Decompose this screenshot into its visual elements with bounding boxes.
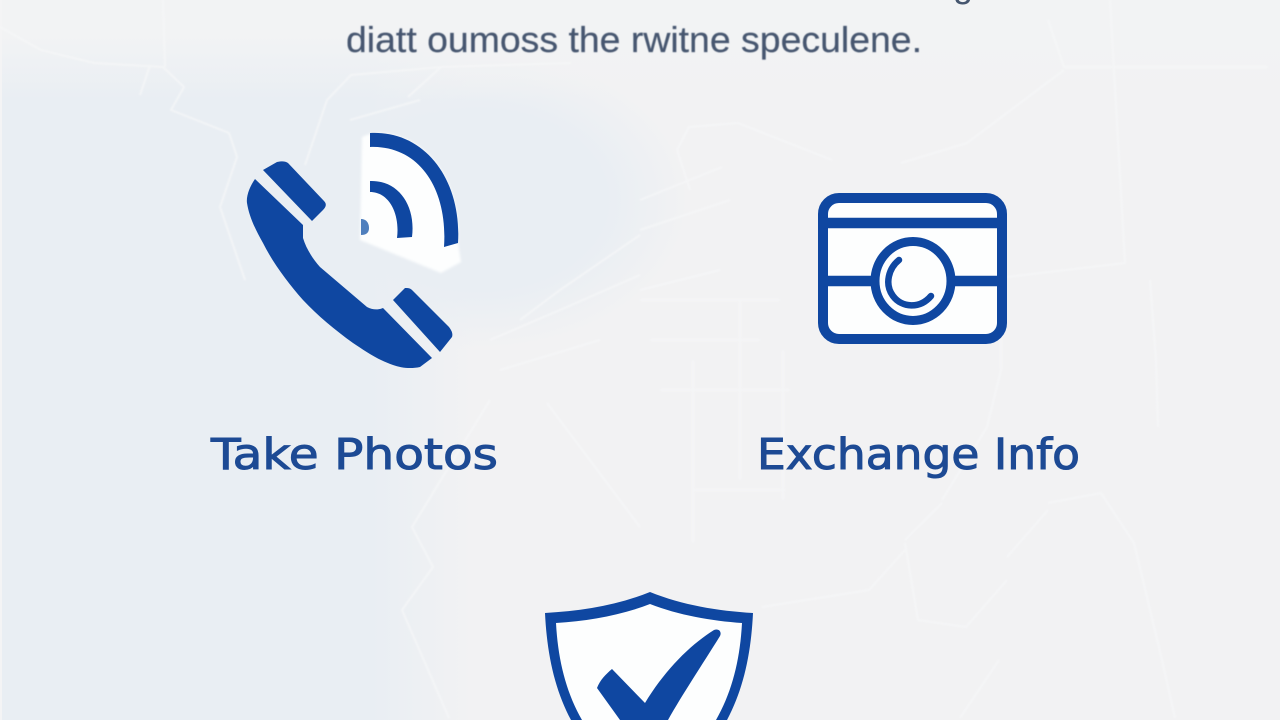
map background	[2, 90, 614, 720]
icon: camera card	[823, 198, 1002, 339]
icon: phone with signal waves	[247, 133, 461, 368]
icon: shield with check	[545, 592, 753, 720]
label: Exchange Info: Exchange Info	[757, 431, 1080, 480]
intro text	[346, 0, 973, 60]
intro text: diatt oumoss the rwitne speculene.	[346, 19, 922, 60]
label: Take Photos: Take Photos	[210, 431, 498, 480]
